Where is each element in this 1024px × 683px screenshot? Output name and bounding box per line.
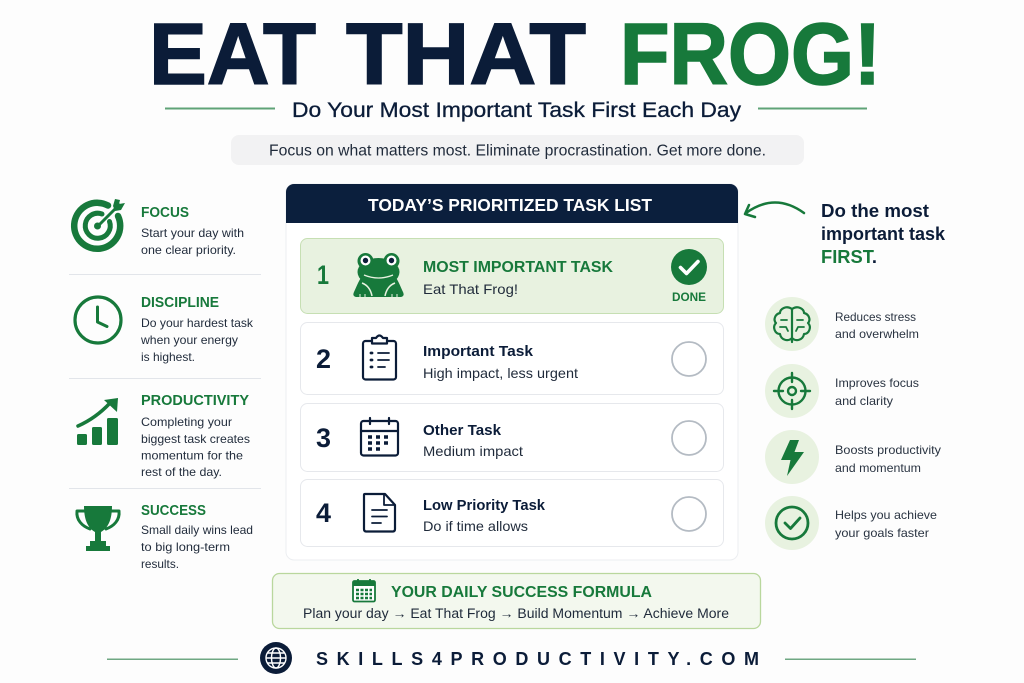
productivity item [77,393,250,479]
panel: daily success formula: Plan your day → Eat That Frog → Build Momentum → Achieve More [303,606,729,621]
panel: right benefits list [765,297,941,550]
discipline item [75,295,254,364]
task 4 [300,480,724,546]
icon: document [364,494,395,532]
card header [286,184,738,223]
tagline pill: Focus on what matters most. Eliminate procrastination. Get more done. [269,142,766,160]
icon: brain [774,307,810,342]
icon: target [74,199,125,249]
benefit: improves focus: and clarity [835,394,893,408]
title [149,6,881,103]
productivity item: PRODUCTIVITY [141,393,249,409]
subtitle: Do Your Most Important Task First Each Day [292,98,741,122]
task 1: 1 [317,260,329,290]
title: THAT [346,6,586,103]
icon: trophy [77,506,119,551]
task 2: 2 [316,344,331,374]
icon: lightning bolt [781,440,804,476]
task 3: Medium impact [423,443,523,459]
icon: crosshair [774,373,810,409]
callout: do the most important task first: important task [821,224,946,244]
success item: Small daily wins lead [141,523,253,537]
success item: to big long-term [141,540,230,554]
title: EAT [149,6,316,103]
task 2: Important Task [423,343,534,360]
benefit: boosts productivity: Boosts productivity [835,443,941,457]
benefit: reduces stress: Reduces stress [835,310,916,324]
icon: frog [353,253,404,297]
discipline item: is highest. [141,350,195,364]
benefit: reduces stress [765,297,919,351]
task 2: High impact, less urgent [423,365,578,381]
icon: check circle [776,507,808,539]
discipline item: Do your hardest task [141,316,254,330]
focus item: one clear priority. [141,243,236,257]
task 4: Low Priority Task [423,497,546,514]
icon: done check [671,249,707,285]
task 1 [300,238,724,314]
success item: results. [141,557,179,571]
callout: do the most important task first: Do the most [821,201,929,221]
benefit: boosts productivity: and momentum [835,461,921,475]
task 2 [300,322,724,394]
focus item: Start your day with [141,226,244,240]
task 3 [300,404,724,472]
status circle [672,342,706,376]
panel: prioritized task list [286,184,738,560]
icon: clock [75,297,121,343]
focus item [74,199,244,257]
icon: green calendar [353,579,375,602]
task 3: Other Task [423,422,502,439]
productivity item: Completing your [141,415,232,429]
callout: do the most important task first: FIRST. [821,247,877,267]
benefit: achieve goals [765,496,937,550]
status circle [672,497,706,531]
benefit: reduces stress: and overwhelm [835,327,919,341]
task 1: DONE [672,292,706,304]
benefit: improves focus [765,364,919,418]
benefit: boosts productivity [765,430,941,484]
status circle [672,421,706,455]
benefit: achieve goals: your goals faster [835,526,929,540]
success item: SUCCESS [141,503,206,519]
task 4: 4 [316,498,331,528]
productivity item: biggest task creates [141,432,250,446]
panel: daily success formula: YOUR DAILY SUCCESS FORMULA [391,584,652,601]
productivity item: rest of the day. [141,465,222,479]
benefit: improves focus: Improves focus [835,376,919,390]
footer website [107,642,916,674]
tagline pill [231,135,804,165]
discipline item: when your energy [140,333,238,347]
benefit: achieve goals: Helps you achieve [835,508,937,522]
panel: left benefits column [69,199,261,571]
task 1: Eat That Frog! [423,281,518,297]
task 3: 3 [316,423,331,453]
productivity item: momentum for the [141,448,243,462]
task 1: MOST IMPORTANT TASK [423,259,614,276]
title: FROG! [620,6,881,103]
icon: clipboard [363,336,396,380]
focus item: FOCUS [141,205,189,221]
icon: rising bars [77,398,118,445]
task 4: Do if time allows [423,518,528,534]
card header: TODAY’S PRIORITIZED TASK LIST [368,195,652,215]
footer website: SKILLS4PRODUCTIVITY.COM [316,649,759,669]
callout: do the most important task first [821,201,946,267]
panel: daily success formula [272,574,760,628]
success item [77,503,253,571]
icon: calendar [361,418,398,456]
arrow pointing to task list [745,202,804,217]
discipline item: DISCIPLINE [141,295,219,311]
icon: globe [260,642,292,674]
